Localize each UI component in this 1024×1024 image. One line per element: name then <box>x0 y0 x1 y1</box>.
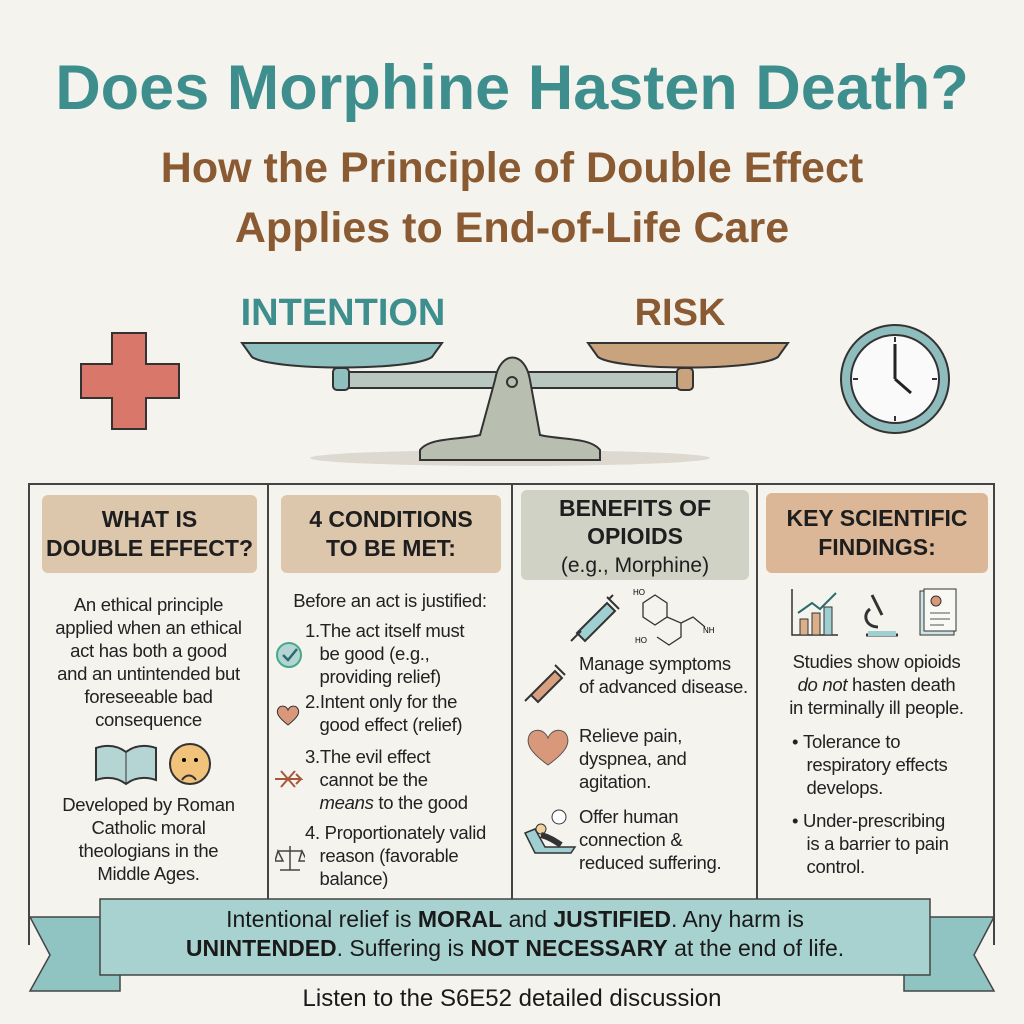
benefit 3: connection & <box>579 829 682 850</box>
icon: crossed arrow <box>275 770 304 788</box>
heading: key findings <box>766 493 988 573</box>
panel: what is double effect <box>42 495 257 884</box>
condition 1 <box>305 620 464 687</box>
heading: benefits: (e.g., Morphine) <box>561 554 709 577</box>
condition 2: good effect (relief) <box>320 714 462 735</box>
heading: 4 conditions: TO BE MET: <box>326 535 456 561</box>
footer text: Listen to the S6E52 detailed discussion <box>303 985 721 1012</box>
title: Does Morphine Hasten Death? <box>55 53 969 123</box>
text: origin: Middle Ages. <box>97 863 200 884</box>
condition 1: be good (e.g., <box>320 643 430 664</box>
benefit 2: agitation. <box>579 771 651 792</box>
icon: small scale <box>275 846 305 871</box>
panels frame <box>28 483 995 945</box>
condition 4: balance) <box>320 868 388 889</box>
heading: key findings: FINDINGS: <box>818 534 936 560</box>
condition 1: providing relief) <box>320 666 441 687</box>
bullet: under-prescribing: is a barrier to pain <box>807 833 949 854</box>
text: studies: in terminally ill people. <box>789 697 964 718</box>
icon: syringe and molecule: HO <box>633 588 645 597</box>
icon: syringe and molecule <box>570 588 715 646</box>
icon: book and thinking face <box>95 743 211 786</box>
bullet: under-prescribing: control. <box>807 856 865 877</box>
text: origin: Catholic moral <box>91 817 206 838</box>
icons: chart, microscope, document <box>791 588 956 636</box>
condition 2: 2.Intent only for the <box>305 691 457 712</box>
benefit 3: Offer human <box>579 806 678 827</box>
bullet: tolerance: develops. <box>807 777 883 798</box>
text: definition <box>55 594 242 730</box>
heading: benefits: OPIOIDS <box>587 523 683 549</box>
icon: syringe and molecule: HO <box>635 636 647 645</box>
text: origin: Developed by Roman <box>62 794 235 815</box>
benefit 1: Manage symptoms <box>579 653 731 674</box>
condition 1: 1.The act itself must <box>305 620 464 641</box>
text: conclusion: Intentional relief is MORAL and JUSTIFIED. Any harm is <box>226 906 804 932</box>
subtitle: Applies to End-of-Life Care <box>235 204 789 252</box>
heading: what is double effect <box>42 495 257 573</box>
subtitle <box>161 144 863 252</box>
panel: 4 conditions <box>275 495 501 889</box>
icon: syringe and molecule: NH <box>703 626 715 635</box>
bullet: tolerance: • Tolerance to <box>792 731 900 752</box>
heading: benefits: BENEFITS OF <box>559 495 711 521</box>
icon: heart <box>528 730 568 766</box>
condition 4 <box>305 822 486 889</box>
bullet: tolerance: respiratory effects <box>807 754 948 775</box>
text: studies: do not hasten death <box>798 674 955 695</box>
benefit 2 <box>579 725 686 792</box>
label: risk: RISK <box>635 292 725 334</box>
heading: what is double effect: DOUBLE EFFECT? <box>46 535 253 561</box>
benefit 2: Relieve pain, <box>579 725 682 746</box>
icon: red cross <box>80 332 180 430</box>
condition 3: cannot be the <box>320 769 428 790</box>
bullet: under-prescribing <box>792 810 949 877</box>
condition 2 <box>305 691 462 735</box>
text: conclusion <box>186 906 844 961</box>
text: conclusion: UNINTENDED. Suffering is NOT NECESSARY at the end of life. <box>186 935 844 961</box>
benefit 2: dyspnea, and <box>579 748 686 769</box>
icon: balance scale <box>240 342 790 466</box>
condition 3: 3.The evil effect <box>305 746 430 767</box>
text: studies: Studies show opioids <box>793 651 960 672</box>
text: definition: act has both a good <box>70 640 227 661</box>
heading: 4 conditions <box>281 495 501 573</box>
icon: check <box>276 642 302 668</box>
heading: benefits <box>521 490 749 580</box>
panel: benefits of opioids <box>521 490 749 873</box>
condition 4: reason (favorable <box>320 845 458 866</box>
condition 3: means to the good <box>320 792 468 813</box>
icon: syringe <box>524 664 566 704</box>
text: origin <box>62 794 235 884</box>
icon: clock <box>840 324 950 434</box>
text: definition: An ethical principle <box>74 594 223 615</box>
text: studies <box>789 651 964 718</box>
text: intro: Before an act is justified: <box>293 590 487 611</box>
benefit 3: reduced suffering. <box>579 852 721 873</box>
text: definition: and an untintended but <box>57 663 240 684</box>
benefit 1 <box>579 653 748 697</box>
benefit 3 <box>579 806 721 873</box>
label: intention: INTENTION <box>241 292 445 334</box>
banner: conclusion ribbon <box>28 898 996 992</box>
subtitle: How the Principle of Double Effect <box>161 144 863 192</box>
icon: patient with speech bubble <box>524 810 576 854</box>
icon: heart <box>276 706 300 726</box>
text: definition: applied when an ethical <box>55 617 242 638</box>
benefit 1: of advanced disease. <box>579 676 748 697</box>
bullet: tolerance <box>792 731 948 798</box>
panel: key scientific findings <box>766 493 988 877</box>
condition 3 <box>305 746 468 813</box>
heading: what is double effect: WHAT IS <box>102 506 197 532</box>
bullet: under-prescribing: • Under-prescribing <box>792 810 945 831</box>
heading: 4 conditions: 4 CONDITIONS <box>309 506 473 532</box>
heading: key findings: KEY SCIENTIFIC <box>786 505 968 531</box>
text: origin: theologians in the <box>79 840 218 861</box>
condition 4: 4. Proportionately valid <box>305 822 486 843</box>
text: definition: consequence <box>95 709 202 730</box>
text: definition: foreseeable bad <box>84 686 213 707</box>
